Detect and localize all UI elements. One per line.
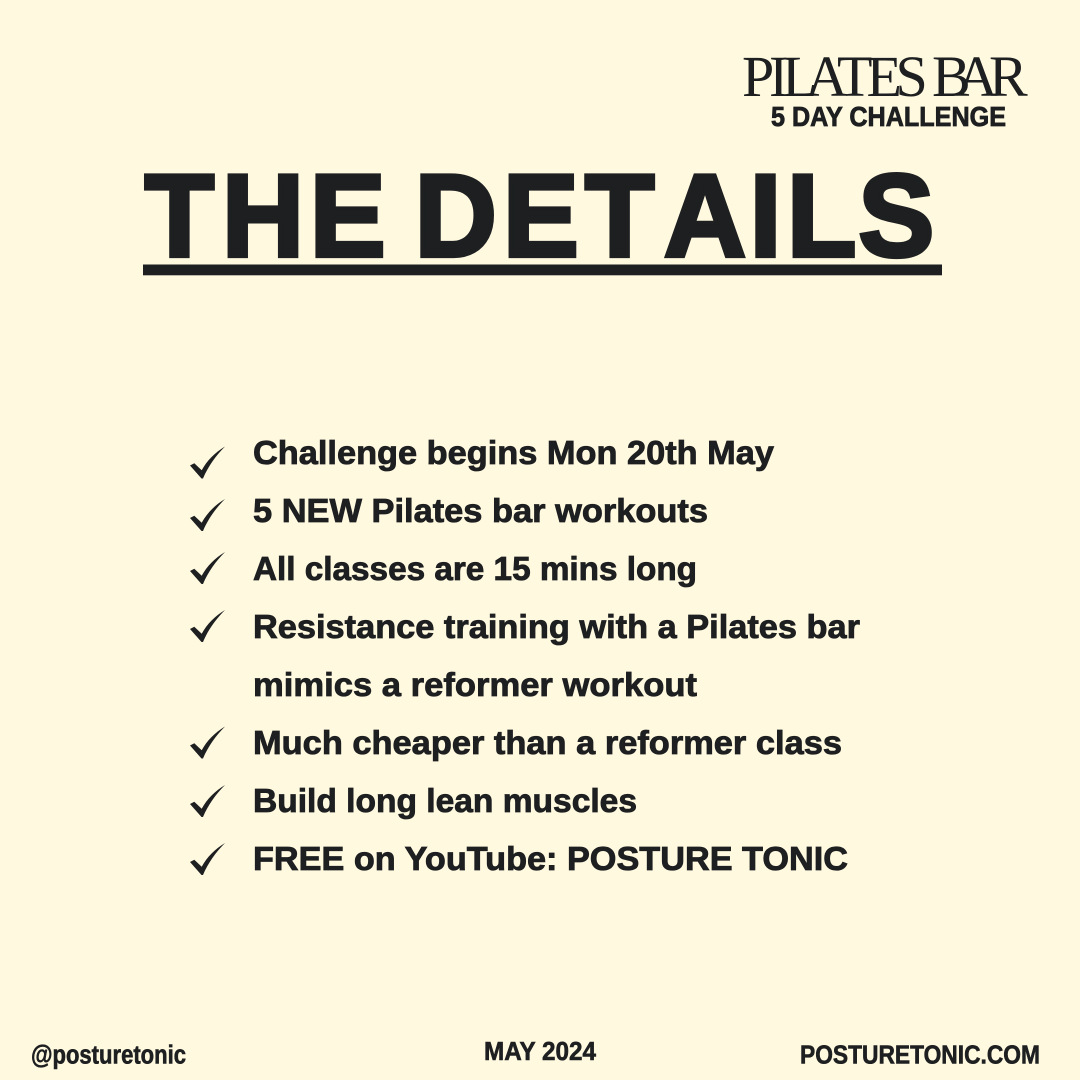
title text: THE DETAILS (145, 151, 934, 281)
item: class length: All classes are 15 mins long (253, 550, 697, 587)
footer (31, 1038, 1040, 1070)
title underline (143, 264, 942, 275)
item: cheaper: Much cheaper than a reformer class (253, 724, 842, 761)
item: challenge start: Challenge begins Mon 20th May (253, 434, 775, 471)
logo subtitle: 5 DAY CHALLENGE (771, 101, 1006, 132)
item: lean muscles: Build long lean muscles (253, 782, 637, 819)
item: free on YouTube: FREE on YouTube: POSTURE TONIC (253, 840, 848, 877)
item: new workouts: 5 NEW Pilates bar workouts (253, 492, 708, 529)
title: The Details (143, 151, 942, 281)
item: resistance training: mimics a reformer workout (253, 666, 697, 703)
logo wordmark: PILATES BAR (742, 44, 1028, 109)
checklist (190, 434, 860, 877)
footer date: MAY 2024 (484, 1038, 597, 1066)
item: resistance training (190, 608, 860, 703)
item: resistance training: Resistance training with a Pilates bar (253, 608, 860, 645)
footer website: POSTURETONIC.COM (800, 1042, 1040, 1070)
logo: Pilates Bar 5 Day Challenge (742, 44, 1028, 132)
footer handle: @posturetonic (31, 1042, 186, 1070)
